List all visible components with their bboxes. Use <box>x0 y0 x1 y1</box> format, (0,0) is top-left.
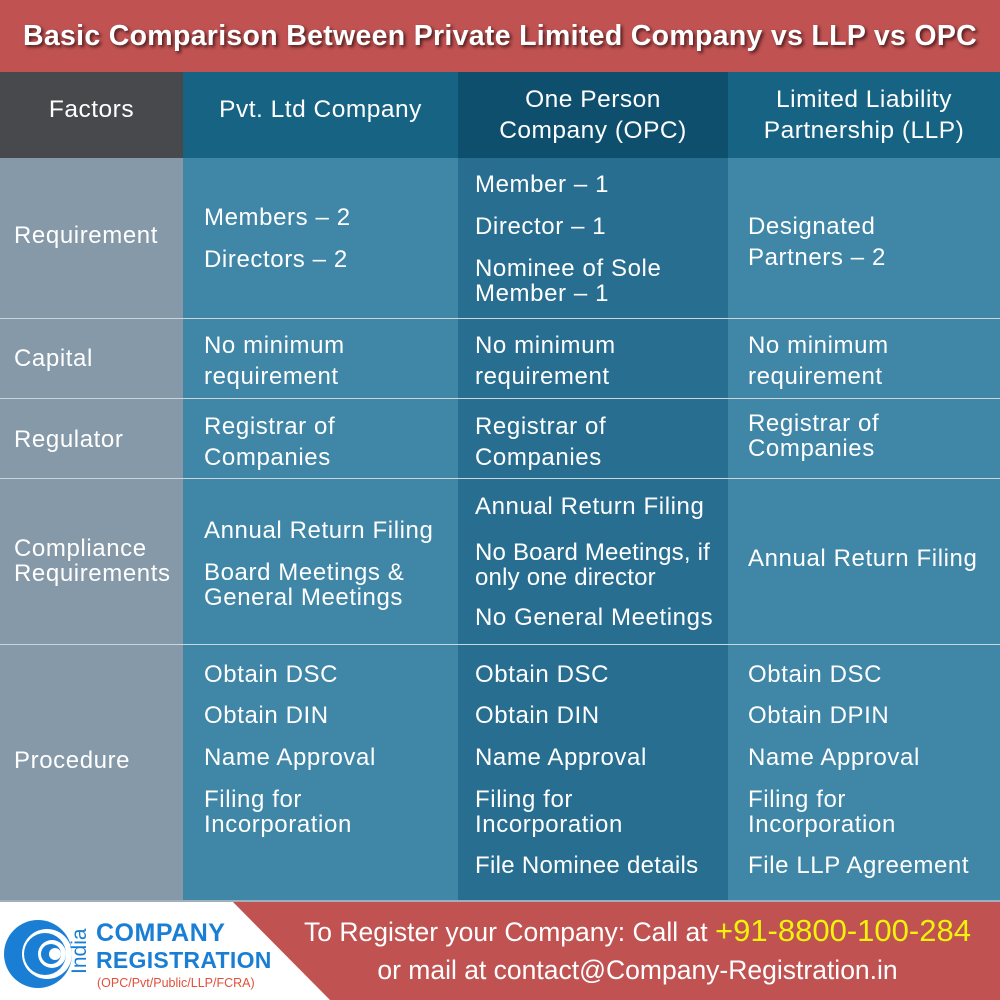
column: opc: Member – 1 <box>475 280 609 307</box>
column: opc: Name Approval <box>475 744 647 771</box>
title bar: Basic Comparison Between Private Limited Company vs LLP vs OPC <box>23 20 977 52</box>
logo: REGISTRATION <box>96 947 272 973</box>
column: opc: File Nominee details <box>475 852 698 879</box>
column: pvt ltd: Name Approval <box>204 744 376 771</box>
header: opc: Company (OPC) <box>499 117 687 144</box>
column: pvt ltd: Incorporation <box>204 811 352 838</box>
column: pvt ltd: General Meetings <box>204 584 403 611</box>
column: factors: Requirement <box>14 222 158 249</box>
column: llp <box>728 158 1000 900</box>
column: factors: Compliance <box>14 535 147 562</box>
header: pvt ltd: Pvt. Ltd Company <box>219 96 422 123</box>
title bar <box>0 0 1000 72</box>
column: opc: Annual Return Filing <box>475 493 704 520</box>
column: pvt ltd: requirement <box>204 363 339 390</box>
column: llp: File LLP Agreement <box>748 852 969 879</box>
column: llp: requirement <box>748 363 883 390</box>
column: opc: Obtain DSC <box>475 661 609 688</box>
column: opc: Companies <box>475 444 602 471</box>
header: factors <box>0 72 183 158</box>
logo: (OPC/Pvt/Public/LLP/FCRA) <box>97 976 255 990</box>
contact text <box>304 913 971 985</box>
column: llp: Annual Return Filing <box>748 545 977 572</box>
header: pvt ltd <box>183 72 458 158</box>
header: opc <box>458 72 728 158</box>
column: pvt ltd: Members – 2 <box>204 204 351 231</box>
contact text: To Register your Company: Call at +91-8800-100-284 <box>304 913 971 948</box>
column: pvt ltd: Board Meetings & <box>204 559 404 586</box>
column: llp: Incorporation <box>748 811 896 838</box>
column: opc: Filing for <box>475 786 573 813</box>
logo: India <box>68 928 91 974</box>
column: opc: Director – 1 <box>475 213 606 240</box>
column: opc: Registrar of <box>475 413 606 440</box>
column: opc <box>458 158 728 900</box>
column: opc: No General Meetings <box>475 604 713 631</box>
column: pvt ltd: Filing for <box>204 786 302 813</box>
column: opc: Incorporation <box>475 811 623 838</box>
column: pvt ltd: Directors – 2 <box>204 246 348 273</box>
column: llp: Name Approval <box>748 744 920 771</box>
logo <box>4 919 272 990</box>
column: factors <box>0 158 183 900</box>
column: pvt ltd: No minimum <box>204 332 345 359</box>
column: opc: Nominee of Sole <box>475 255 661 282</box>
header: opc: One Person <box>525 86 661 113</box>
header: factors: Factors <box>49 96 134 123</box>
column: pvt ltd: Companies <box>204 444 331 471</box>
column: factors: Regulator <box>14 426 123 453</box>
column: pvt ltd: Annual Return Filing <box>204 517 433 544</box>
column: llp: Obtain DPIN <box>748 702 889 729</box>
header: llp <box>728 72 1000 158</box>
column: llp: Registrar of <box>748 410 879 437</box>
column: pvt ltd: Obtain DSC <box>204 661 338 688</box>
column: opc: No Board Meetings, if <box>475 539 710 566</box>
logo: COMPANY <box>96 919 225 947</box>
column: pvt ltd: Obtain DIN <box>204 702 329 729</box>
column: pvt ltd <box>183 158 458 900</box>
column: opc: only one director <box>475 564 656 591</box>
column: opc: Obtain DIN <box>475 702 600 729</box>
column: pvt ltd: Registrar of <box>204 413 335 440</box>
footer <box>0 900 1000 1000</box>
column: llp: Companies <box>748 435 875 462</box>
column: opc: Member – 1 <box>475 171 609 198</box>
header: llp: Limited Liability <box>776 86 952 113</box>
column: factors: Requirements <box>14 560 171 587</box>
column: factors: Procedure <box>14 747 130 774</box>
column: llp: Designated <box>748 213 875 240</box>
column: llp: Obtain DSC <box>748 661 882 688</box>
column: opc: requirement <box>475 363 610 390</box>
contact text: or mail at contact@Company-Registration.in <box>377 955 898 985</box>
column: factors: Capital <box>14 345 93 372</box>
header: llp: Partnership (LLP) <box>764 117 964 144</box>
column: llp: Partners – 2 <box>748 244 886 271</box>
column: llp: No minimum <box>748 332 889 359</box>
column: llp: Filing for <box>748 786 846 813</box>
column: opc: No minimum <box>475 332 616 359</box>
